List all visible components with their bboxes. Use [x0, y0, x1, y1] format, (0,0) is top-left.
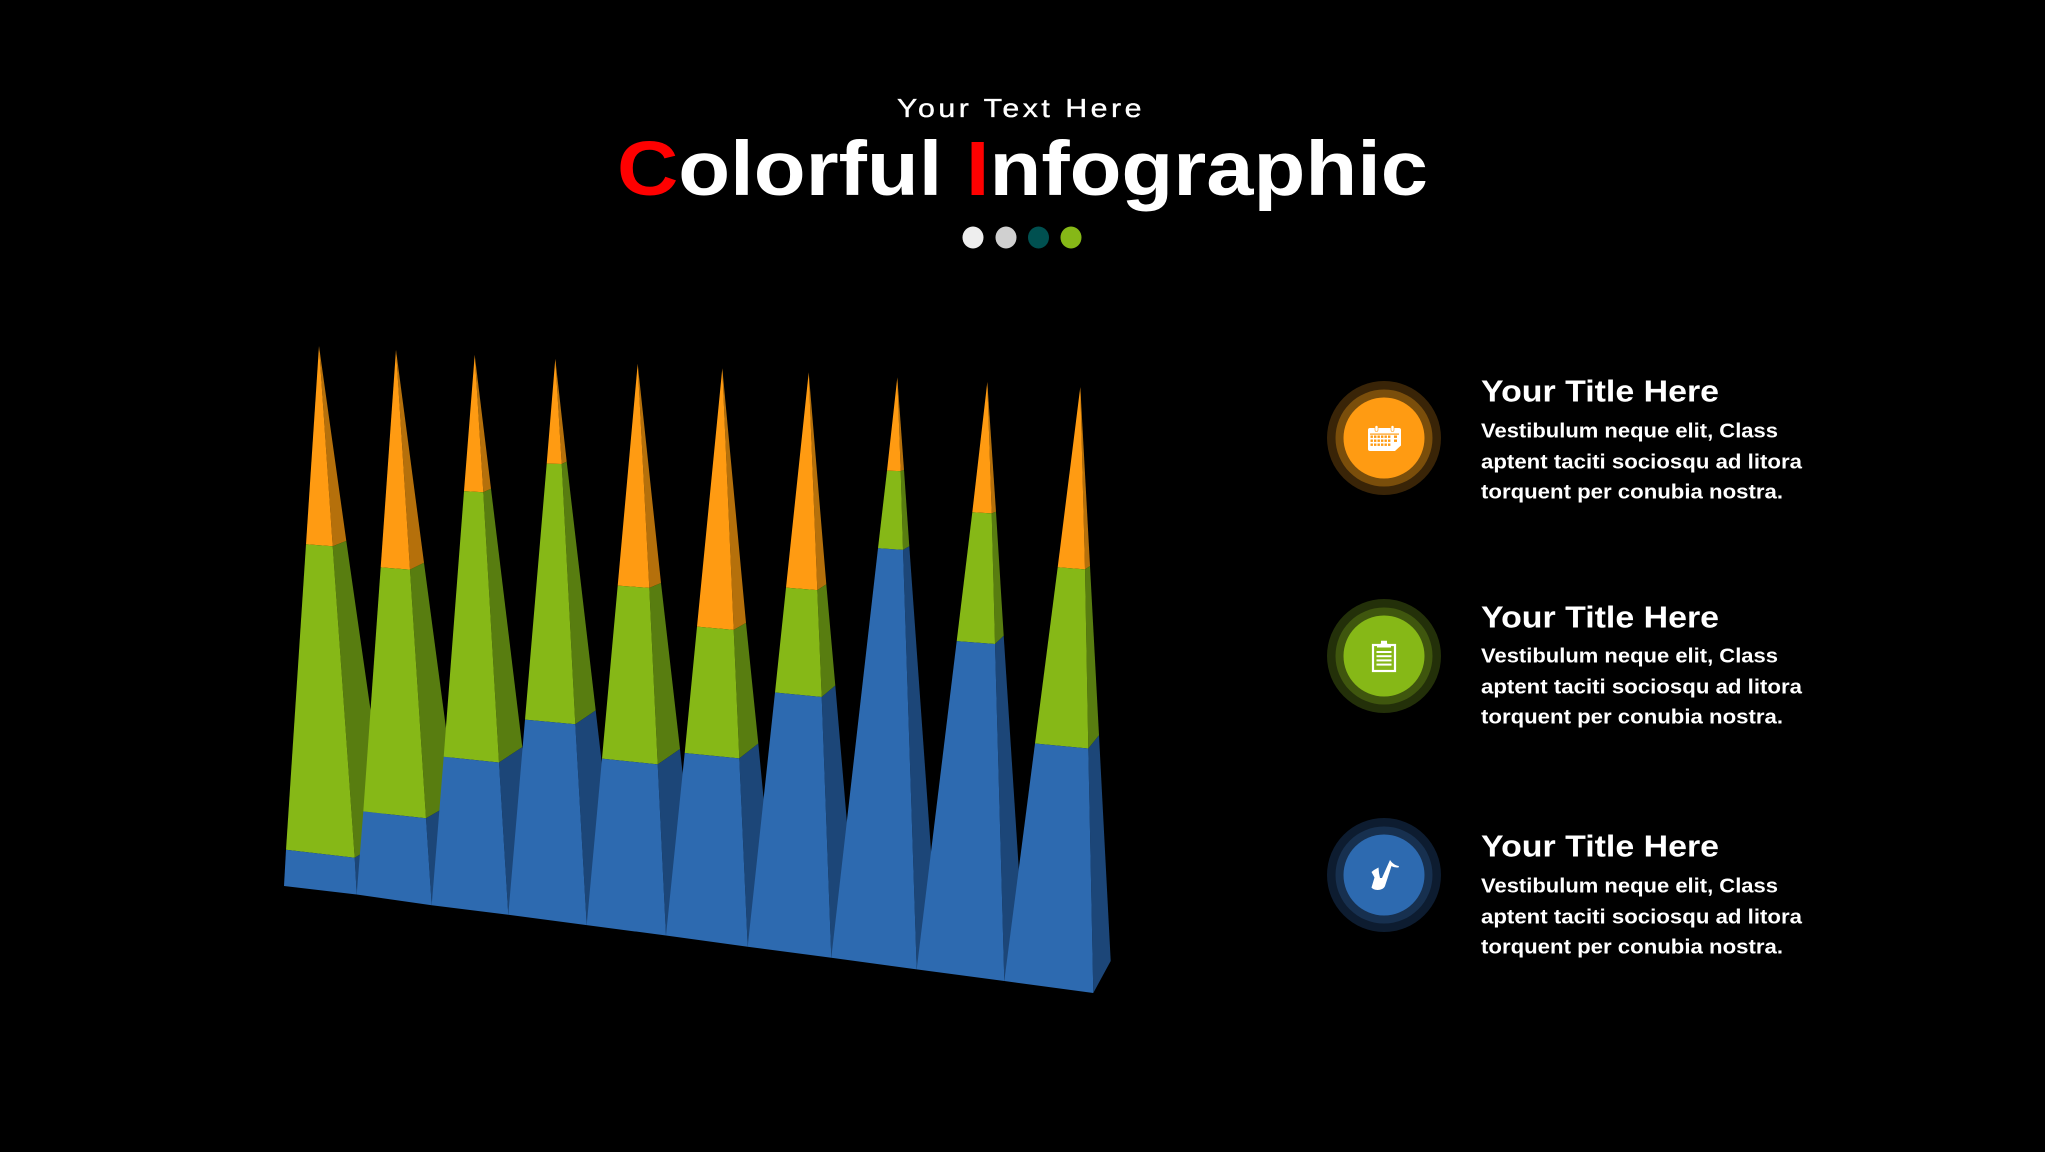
item 3 description: torquent per conubia nostra.: [1481, 936, 1783, 958]
pyramid 7: [748, 372, 857, 958]
decorative colour dots: [962, 226, 1082, 248]
subtitle: Your Text Here: [897, 93, 1145, 123]
header: [617, 93, 1428, 248]
item 2 description: [1481, 646, 1803, 728]
item 2 description: Vestibulum neque elit, Class: [1481, 646, 1778, 668]
item 1: calendar: [1327, 374, 1803, 503]
pyramid 3: [432, 355, 541, 915]
pyramid 1: [284, 346, 394, 894]
item 3 description: Vestibulum neque elit, Class: [1481, 876, 1778, 898]
item 3 heading: Your Title Here: [1481, 829, 1719, 864]
pyramid 6: [666, 368, 776, 947]
pyramid 10: [1004, 387, 1111, 993]
item 2 description: torquent per conubia nostra.: [1481, 706, 1783, 728]
item 1 description: aptent taciti sociosqu ad litora: [1481, 451, 1803, 473]
icon: clipboard badge: [1327, 599, 1441, 713]
item 2: clipboard: [1327, 599, 1803, 728]
item 1 heading: Your Title Here: [1481, 374, 1719, 409]
pyramid 9: [917, 382, 1025, 981]
item 3 description: [1481, 876, 1803, 958]
pyramid 2: [357, 350, 467, 905]
icon: calendar badge: [1327, 381, 1441, 495]
item 1 description: Vestibulum neque elit, Class: [1481, 421, 1778, 443]
pyramid 4: [508, 359, 618, 925]
item 2 description: aptent taciti sociosqu ad litora: [1481, 676, 1803, 698]
title: Colorful Infographic: [617, 126, 1428, 212]
icon: saxophone badge: [1327, 818, 1441, 932]
item 1 description: [1481, 421, 1803, 503]
item 3 description: aptent taciti sociosqu ad litora: [1481, 906, 1803, 928]
pyramid 8: [831, 377, 938, 969]
pyramid 5: [587, 364, 698, 936]
item 3: saxophone: [1327, 818, 1803, 958]
item 2 heading: Your Title Here: [1481, 599, 1719, 634]
pyramid chart: [284, 346, 1111, 993]
item 1 description: torquent per conubia nostra.: [1481, 481, 1783, 503]
